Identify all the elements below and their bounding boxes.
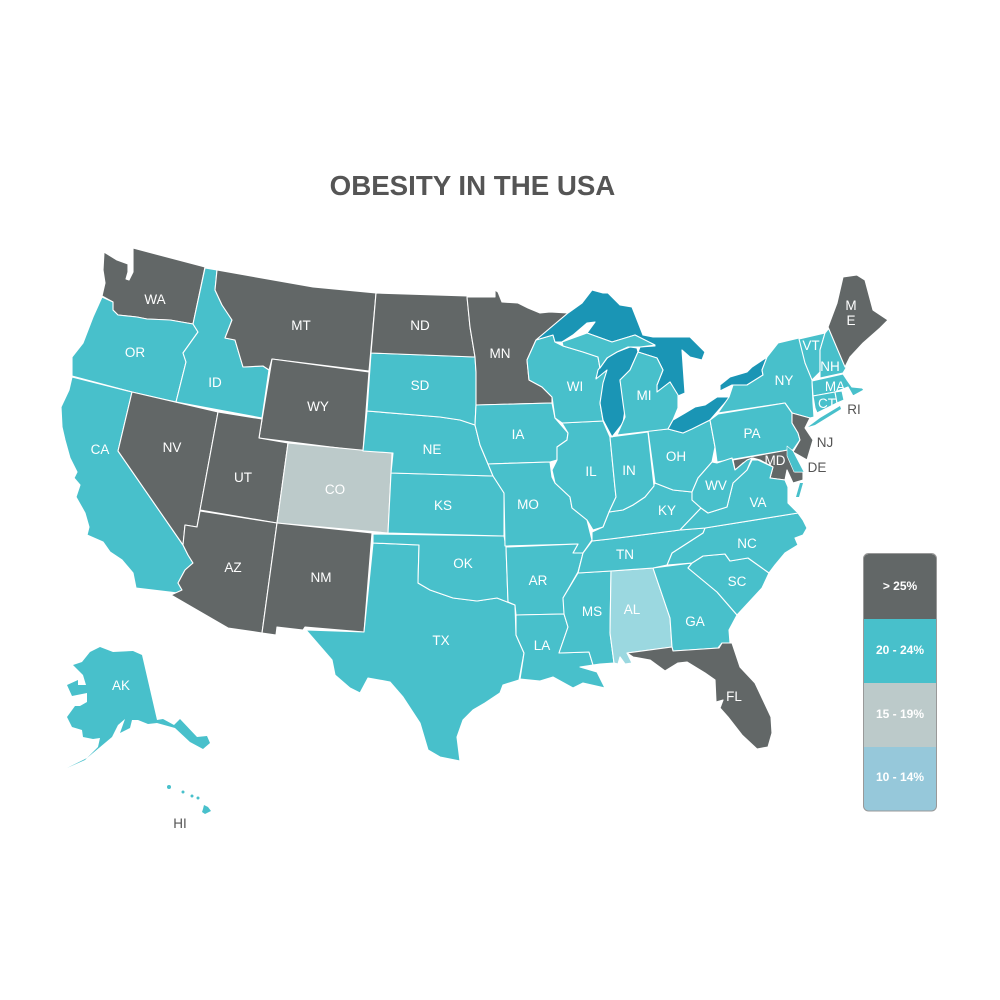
state: AL: [610, 568, 672, 664]
state: AR: AR: [529, 573, 548, 588]
state: WI: WI: [567, 379, 583, 394]
legend row: 15 - 19%: 15 - 19%: [876, 707, 924, 721]
title: OBESITY IN THE USA: [330, 170, 615, 201]
state: MS: [559, 571, 614, 665]
state: IL: [552, 421, 616, 530]
state: KS: KS: [434, 498, 452, 513]
state: ND: [371, 293, 475, 357]
state: AZ: [171, 511, 277, 633]
state: NE: [363, 411, 493, 476]
state: SD: [367, 353, 476, 425]
state: VA: VA: [749, 495, 767, 510]
state: CA: CA: [91, 442, 109, 457]
state: NJ: [792, 413, 833, 460]
state: IN: [609, 432, 654, 512]
state: WV: WV: [705, 478, 727, 493]
state: SD: SD: [411, 378, 430, 393]
state: GA: GA: [685, 614, 705, 629]
state: MD: [733, 450, 803, 483]
state: NJ: NJ: [817, 435, 833, 450]
state: MO: MO: [517, 497, 539, 512]
state: CA: [61, 377, 193, 593]
state: TN: TN: [616, 547, 634, 562]
legend row: 10 - 14%: 10 - 14%: [876, 770, 924, 784]
state: FL: FL: [726, 689, 742, 704]
state: WV: [692, 458, 752, 513]
state: MT: MT: [291, 318, 311, 333]
state: NV: NV: [163, 440, 181, 455]
state: TX: [306, 543, 524, 761]
state: RI: [835, 391, 861, 417]
state: IA: IA: [512, 427, 524, 442]
state: CT: [813, 392, 837, 413]
state: WI: [527, 335, 608, 423]
state: PA: PA: [743, 426, 761, 441]
state: AZ: AZ: [224, 560, 242, 575]
state: AK: AK: [112, 678, 130, 693]
state: MD: MD: [764, 453, 786, 468]
legend row: > 25%: > 25%: [883, 579, 918, 593]
state: MA: MA: [825, 379, 845, 394]
state: NE: NE: [423, 442, 441, 457]
state: VA: [680, 460, 798, 530]
legend row: > 25%: [864, 554, 936, 619]
state: RI: RI: [847, 402, 861, 417]
state: MN: MN: [490, 346, 510, 361]
state: WY: WY: [307, 399, 329, 414]
state: WA: WA: [144, 292, 166, 307]
state: DE: [787, 446, 826, 475]
state: TN: [578, 528, 705, 573]
state: IL: IL: [585, 464, 597, 479]
state: UT: [200, 412, 288, 523]
state: ME: M: [845, 298, 857, 313]
Long Island: [808, 406, 841, 427]
legend border: [864, 554, 936, 811]
state: CT: CT: [818, 396, 836, 411]
state: NY: NY: [775, 373, 793, 388]
state: MO: [488, 462, 592, 553]
lake: Erie: [668, 397, 730, 433]
state: AL: AL: [624, 602, 641, 617]
state: ND: ND: [410, 318, 430, 333]
state: WA: [102, 248, 205, 324]
state: NV: [118, 392, 218, 545]
state: KY: [592, 483, 701, 541]
legend row: 15 - 19%: [864, 683, 936, 747]
state: KS: [388, 473, 504, 536]
state: WY: [259, 359, 369, 451]
state: OR: OR: [125, 345, 145, 360]
state: MI upper peninsula: [562, 333, 655, 368]
state: IA: [475, 403, 568, 464]
state: FL: [627, 643, 772, 749]
lake: Ontario: [720, 357, 767, 391]
state: OR: [72, 297, 198, 402]
VA eastern shore: [796, 483, 803, 497]
legend row: 20 - 24%: [864, 619, 936, 683]
state: AK: [67, 647, 210, 768]
state: OH: [648, 420, 715, 492]
state: ID: ID: [208, 375, 222, 390]
state: ID: [176, 268, 269, 418]
state: CO: CO: [325, 482, 345, 497]
state: OK: OK: [453, 556, 473, 571]
state: KY: KY: [658, 503, 676, 518]
state: ME: [828, 275, 888, 367]
state: VT: [799, 333, 825, 380]
state: MI: MI: [636, 388, 652, 403]
state: SC: SC: [728, 574, 747, 589]
state: MN: [467, 290, 568, 405]
legend: [864, 554, 936, 811]
map of the USA: [61, 248, 888, 831]
state: VT: VT: [802, 338, 820, 353]
state: NY: [718, 338, 814, 418]
state: LA: LA: [534, 638, 550, 653]
state: SC: [688, 554, 769, 615]
lake: Superior and Huron: [536, 290, 705, 396]
state: AR: [506, 544, 583, 615]
state: NM: [262, 523, 372, 635]
state: IN: IN: [622, 463, 636, 478]
state: DE: DE: [808, 460, 826, 475]
state: NH: [820, 328, 846, 378]
state: NC: [667, 513, 807, 573]
state: UT: UT: [234, 470, 252, 485]
state: OH: OH: [666, 449, 686, 464]
state: GA: [653, 563, 737, 651]
state: MS: MS: [582, 604, 602, 619]
state: HI: [167, 785, 211, 831]
state: NM: NM: [310, 570, 332, 585]
state: NH: NH: [820, 359, 840, 374]
state: TX: TX: [432, 633, 450, 648]
state: MA: [812, 374, 864, 396]
state: PA: [710, 403, 800, 462]
lake: Michigan: [596, 347, 638, 437]
state: HI: HI: [173, 816, 187, 831]
state: MT: [215, 270, 376, 371]
legend row: 10 - 14%: [864, 747, 936, 811]
state: OK: [373, 534, 515, 605]
state: NC: NC: [737, 536, 757, 551]
state: CO: [277, 443, 392, 533]
state: ME: E: [846, 313, 856, 328]
state: LA: [516, 614, 605, 688]
legend row: 20 - 24%: 20 - 24%: [876, 643, 924, 657]
state: MI: [617, 352, 678, 435]
